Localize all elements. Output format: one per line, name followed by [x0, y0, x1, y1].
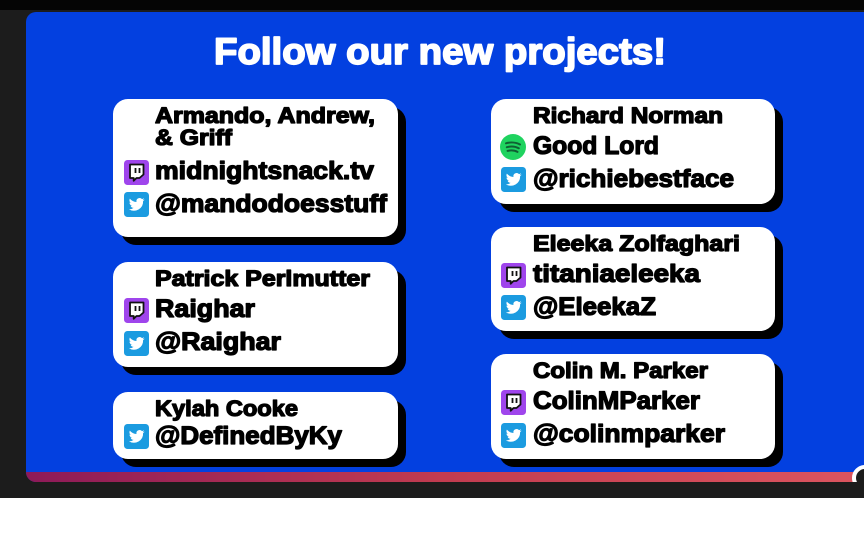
name: Kylah Cooke	[155, 396, 298, 421]
icon: twitter	[124, 192, 149, 217]
name: Armando, Andrew,	[155, 103, 375, 128]
twitter handle: @colinmparker	[533, 420, 725, 448]
icon: twitch	[501, 263, 526, 288]
icon: twitch	[124, 298, 149, 323]
card: Eleeka Zolfaghari	[491, 227, 783, 339]
name: Eleeka Zolfaghari	[533, 231, 740, 256]
twitch handle: midnightsnack.tv	[155, 157, 374, 185]
name line 2: & Griff	[155, 125, 233, 150]
name: Colin M. Parker	[533, 358, 708, 383]
icon: spotify	[500, 134, 526, 160]
name: Richard Norman	[533, 103, 723, 128]
icon: twitch	[124, 160, 149, 185]
progress bar	[26, 472, 864, 482]
icon: twitter	[501, 295, 526, 320]
twitter handle: @mandodoesstuff	[155, 190, 388, 218]
spotify handle: Good Lord	[533, 132, 659, 160]
twitter handle: @Raighar	[155, 328, 281, 356]
twitter handle: @DefinedByKy	[155, 422, 342, 450]
card: Kylah Cooke	[113, 392, 406, 467]
twitch handle: titaniaeleeka	[533, 260, 701, 288]
card: Patrick Perlmutter	[113, 262, 406, 375]
icon: twitter	[124, 424, 149, 449]
twitch handle: ColinMParker	[533, 387, 700, 415]
title: Follow our new projects!	[214, 31, 666, 72]
name: Patrick Perlmutter	[155, 266, 370, 291]
card: Armando, Andrew & Griff	[113, 99, 406, 245]
card: Colin M. Parker	[491, 354, 783, 467]
top black strip	[0, 0, 864, 10]
twitch handle: Raighar	[155, 295, 255, 323]
icon: twitter	[501, 423, 526, 448]
icon: twitch	[501, 390, 526, 415]
twitter handle: @richiebestface	[533, 165, 734, 193]
card: Richard Norman	[491, 99, 783, 212]
twitter handle: @EleekaZ	[533, 293, 656, 321]
icon: twitter	[501, 167, 526, 192]
progress handle	[854, 467, 864, 489]
icon: twitter	[124, 331, 149, 356]
